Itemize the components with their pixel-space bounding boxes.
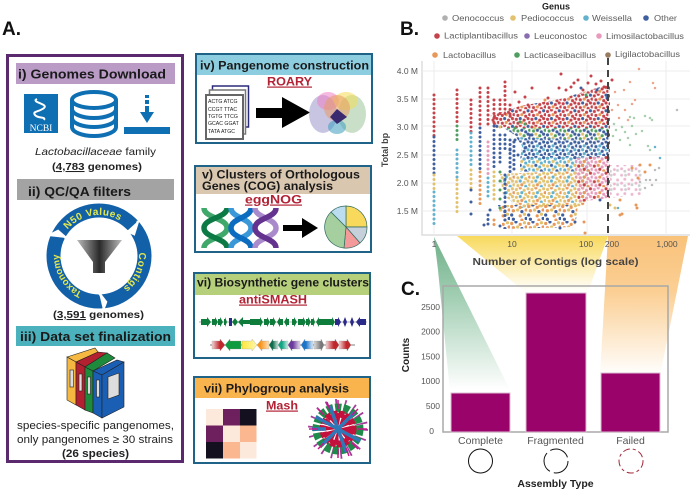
y axis: counts [401,302,440,436]
legend: genus [432,2,684,60]
heading: COG analysis: Genes (COG) analysis [202,179,333,193]
arrow [283,218,318,238]
legend: genus: Other [654,13,677,23]
icon: venn diagram [309,92,366,134]
x axis: number of contigs: 10 [507,239,517,249]
panel A: genome processing [6,54,184,463]
legend: genus: Leuconostoc [534,31,588,41]
panel: COG analysis [195,166,371,252]
y axis: counts: 0 [429,426,434,436]
icon: database [72,92,116,136]
tool: ROARY: ROARY [267,74,312,88]
icon: sequence documents: TGTG TTCG [208,114,238,120]
icon: NCBI [24,94,58,134]
y axis: counts: 1000 [421,376,440,386]
text: filtered count: (3,591 genomes) [53,309,144,321]
panel: phylogroup analysis [194,377,370,463]
heading: pangenome construction [197,55,371,75]
legend: genus: Pediococcus [521,13,574,23]
text: family count: (4,783 genomes) [52,161,142,173]
tool: antiSMASH: antiSMASH [239,292,307,306]
arrow [256,97,310,128]
bar chart: assembly type counts [401,286,668,490]
dots: dense clusters [490,84,642,229]
y axis: total bp: 4.0 M [397,66,418,76]
heatmap [206,409,256,458]
icon: filter cycle: Contigs [124,253,146,291]
x axis: assembly types: Fragmented [527,435,584,447]
x axis: number of contigs: 200 [605,239,619,249]
icon: sequence documents: CCGT TTAC [208,107,237,113]
panel label B: B. [400,19,419,40]
x axis: number of contigs [432,239,678,268]
heading: QC/QA filters: ii) QC/QA filters [28,184,131,199]
icon: failed genome circle [619,449,643,473]
heading: pangenome construction: iv) Pangenome construction [200,58,369,72]
legend: genus: Genus [542,2,570,12]
bar: fragmented [526,293,586,432]
icon: complete genome circle [468,449,492,473]
panel: pangenome construction [196,54,372,143]
funnel: failed assemblies [600,236,688,376]
funnel: complete assemblies [434,237,511,392]
icon: funnel [77,240,122,273]
heading: data set finalization [16,326,175,346]
legend: genus: Lactobacillus [443,50,496,60]
icon: sequence documents: TATA ATGC [208,129,235,135]
heading: genomes download: i) Genomes Download [18,66,166,82]
y axis: total bp [380,66,418,216]
heading: data set finalization: iii) Data set finalization [20,329,171,344]
icon: DNA helices [204,208,276,248]
y axis: counts: 1500 [421,352,440,362]
icon: sequence documents [206,86,248,139]
heading: biosynthetic gene clusters: vi) Biosynthetic gene clusters [197,276,369,290]
panel: biosynthetic gene clusters [194,273,370,358]
legend: genus: Limosilactobacillus [606,31,684,41]
x axis: assembly types: Complete [458,435,503,447]
phylogenetic tree [309,400,367,458]
dots: discrete contig columns [434,82,514,228]
icon: filter cycle: N50 Values [63,208,122,229]
y axis: counts: 2000 [421,326,440,336]
y axis: total bp: 1.5 M [397,206,418,216]
text: species-specific pangenomes: only pangenomes ≥ 30 strains [17,434,174,446]
heading: phylogroup analysis [195,378,369,398]
icon: binders [67,348,124,418]
y axis: total bp: 3.5 M [397,94,418,104]
dots: scattered points [484,69,677,233]
icon: sequence documents: ACTG ATCG [208,99,238,105]
icon: fragmented genome circle [544,449,568,473]
heading: COG analysis: v) Clusters of Orthologous [202,168,360,182]
bar: failed [601,373,660,432]
gene cluster: overview track [199,317,367,327]
text: species-specific pangenomes: (26 species) [62,448,129,460]
text: family count [35,146,157,173]
y axis: total bp: 2.5 M [397,150,418,160]
pie chart [325,206,367,248]
x axis: number of contigs: 100 [579,239,593,249]
tool: eggNOG: eggNOG [245,192,302,206]
icon: download arrow [124,95,170,134]
tool: Mash: Mash [266,398,298,412]
x axis: assembly types: Failed [616,435,645,447]
x axis: number of contigs: Number of Contigs (log scale) [472,256,638,268]
y axis: total bp: 3.0 M [397,122,418,132]
y axis: counts: Counts [401,337,412,372]
x axis: assembly types: Assembly Type [517,478,594,490]
scatter plot: contigs vs total bp [422,58,690,235]
icon: filter cycle [46,204,152,308]
icon: NCBI: NCBI [30,124,52,134]
legend: genus: Lacticaseibacillus [524,50,596,60]
gene cluster: detail track [210,339,355,351]
icon: sequence documents: GCAC GGAT [208,121,240,127]
bar: complete [451,393,510,432]
text: family count: Lactobacillaceae family [35,146,157,158]
panel label C: C. [401,279,420,300]
legend: genus: Oenococcus [452,13,504,23]
text: species-specific pangenomes [17,420,174,460]
text: species-specific pangenomes: species-specific pangenomes, [17,420,174,432]
heading: biosynthetic gene clusters [195,274,369,295]
legend: genus: Ligilactobacillus [615,49,680,59]
y axis: total bp: 2.0 M [397,178,418,188]
legend: genus: Lactiplantibacillus [444,30,518,40]
y axis: counts: 2500 [421,302,440,312]
heading: genomes download [16,63,175,84]
y axis: total bp: Total bp [380,132,390,167]
panel label A: A. [2,19,21,40]
heading: QC/QA filters [17,179,174,200]
heading: phylogroup analysis: vii) Phylogroup analysis [204,382,349,396]
heading: COG analysis [196,167,370,194]
funnel: fragmented assemblies [457,236,608,292]
y axis: counts: 500 [426,401,440,411]
x axis: number of contigs: 1 [432,239,437,249]
legend: genus: Weissella [592,13,632,23]
icon: filter cycle: Taxonomy [54,254,80,298]
x axis: assembly types [458,435,645,490]
x axis: number of contigs: 1,000 [656,239,678,249]
threshold line at 200 contigs [607,58,609,235]
